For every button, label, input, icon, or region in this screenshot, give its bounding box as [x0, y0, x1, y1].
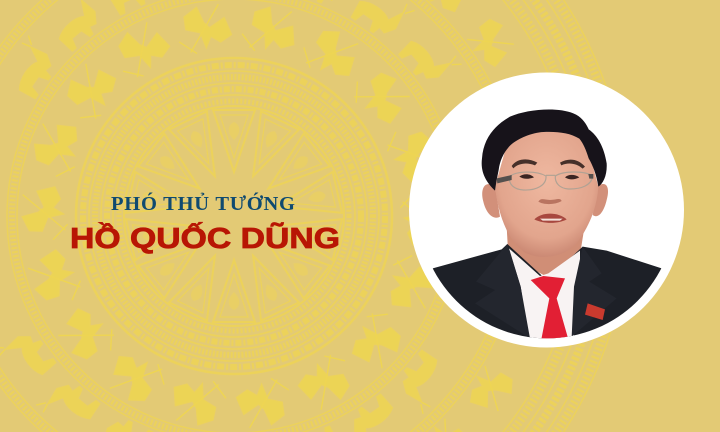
right lapel	[572, 246, 583, 336]
white circle frame	[409, 72, 684, 348]
heading: name: HỒ QUỐC DŨNG	[70, 221, 340, 255]
nose	[538, 199, 562, 204]
portrait circle	[409, 72, 684, 360]
glasses	[509, 172, 593, 190]
ears	[482, 184, 608, 218]
eyebrows	[512, 159, 585, 169]
eyes	[519, 174, 579, 179]
face	[495, 130, 598, 257]
hair	[482, 110, 607, 191]
shirt	[509, 248, 580, 347]
necktie	[531, 276, 568, 339]
left lapel	[506, 244, 530, 338]
title block	[70, 191, 340, 255]
neck	[506, 230, 584, 275]
jacket	[432, 244, 662, 338]
teeth	[540, 219, 563, 221]
glasses arms	[497, 174, 593, 183]
mouth	[534, 214, 567, 223]
portrait illustration	[432, 110, 662, 338]
heading: role: PHÓ THỦ TƯỚNG	[111, 191, 295, 215]
lapel pin	[585, 303, 605, 320]
